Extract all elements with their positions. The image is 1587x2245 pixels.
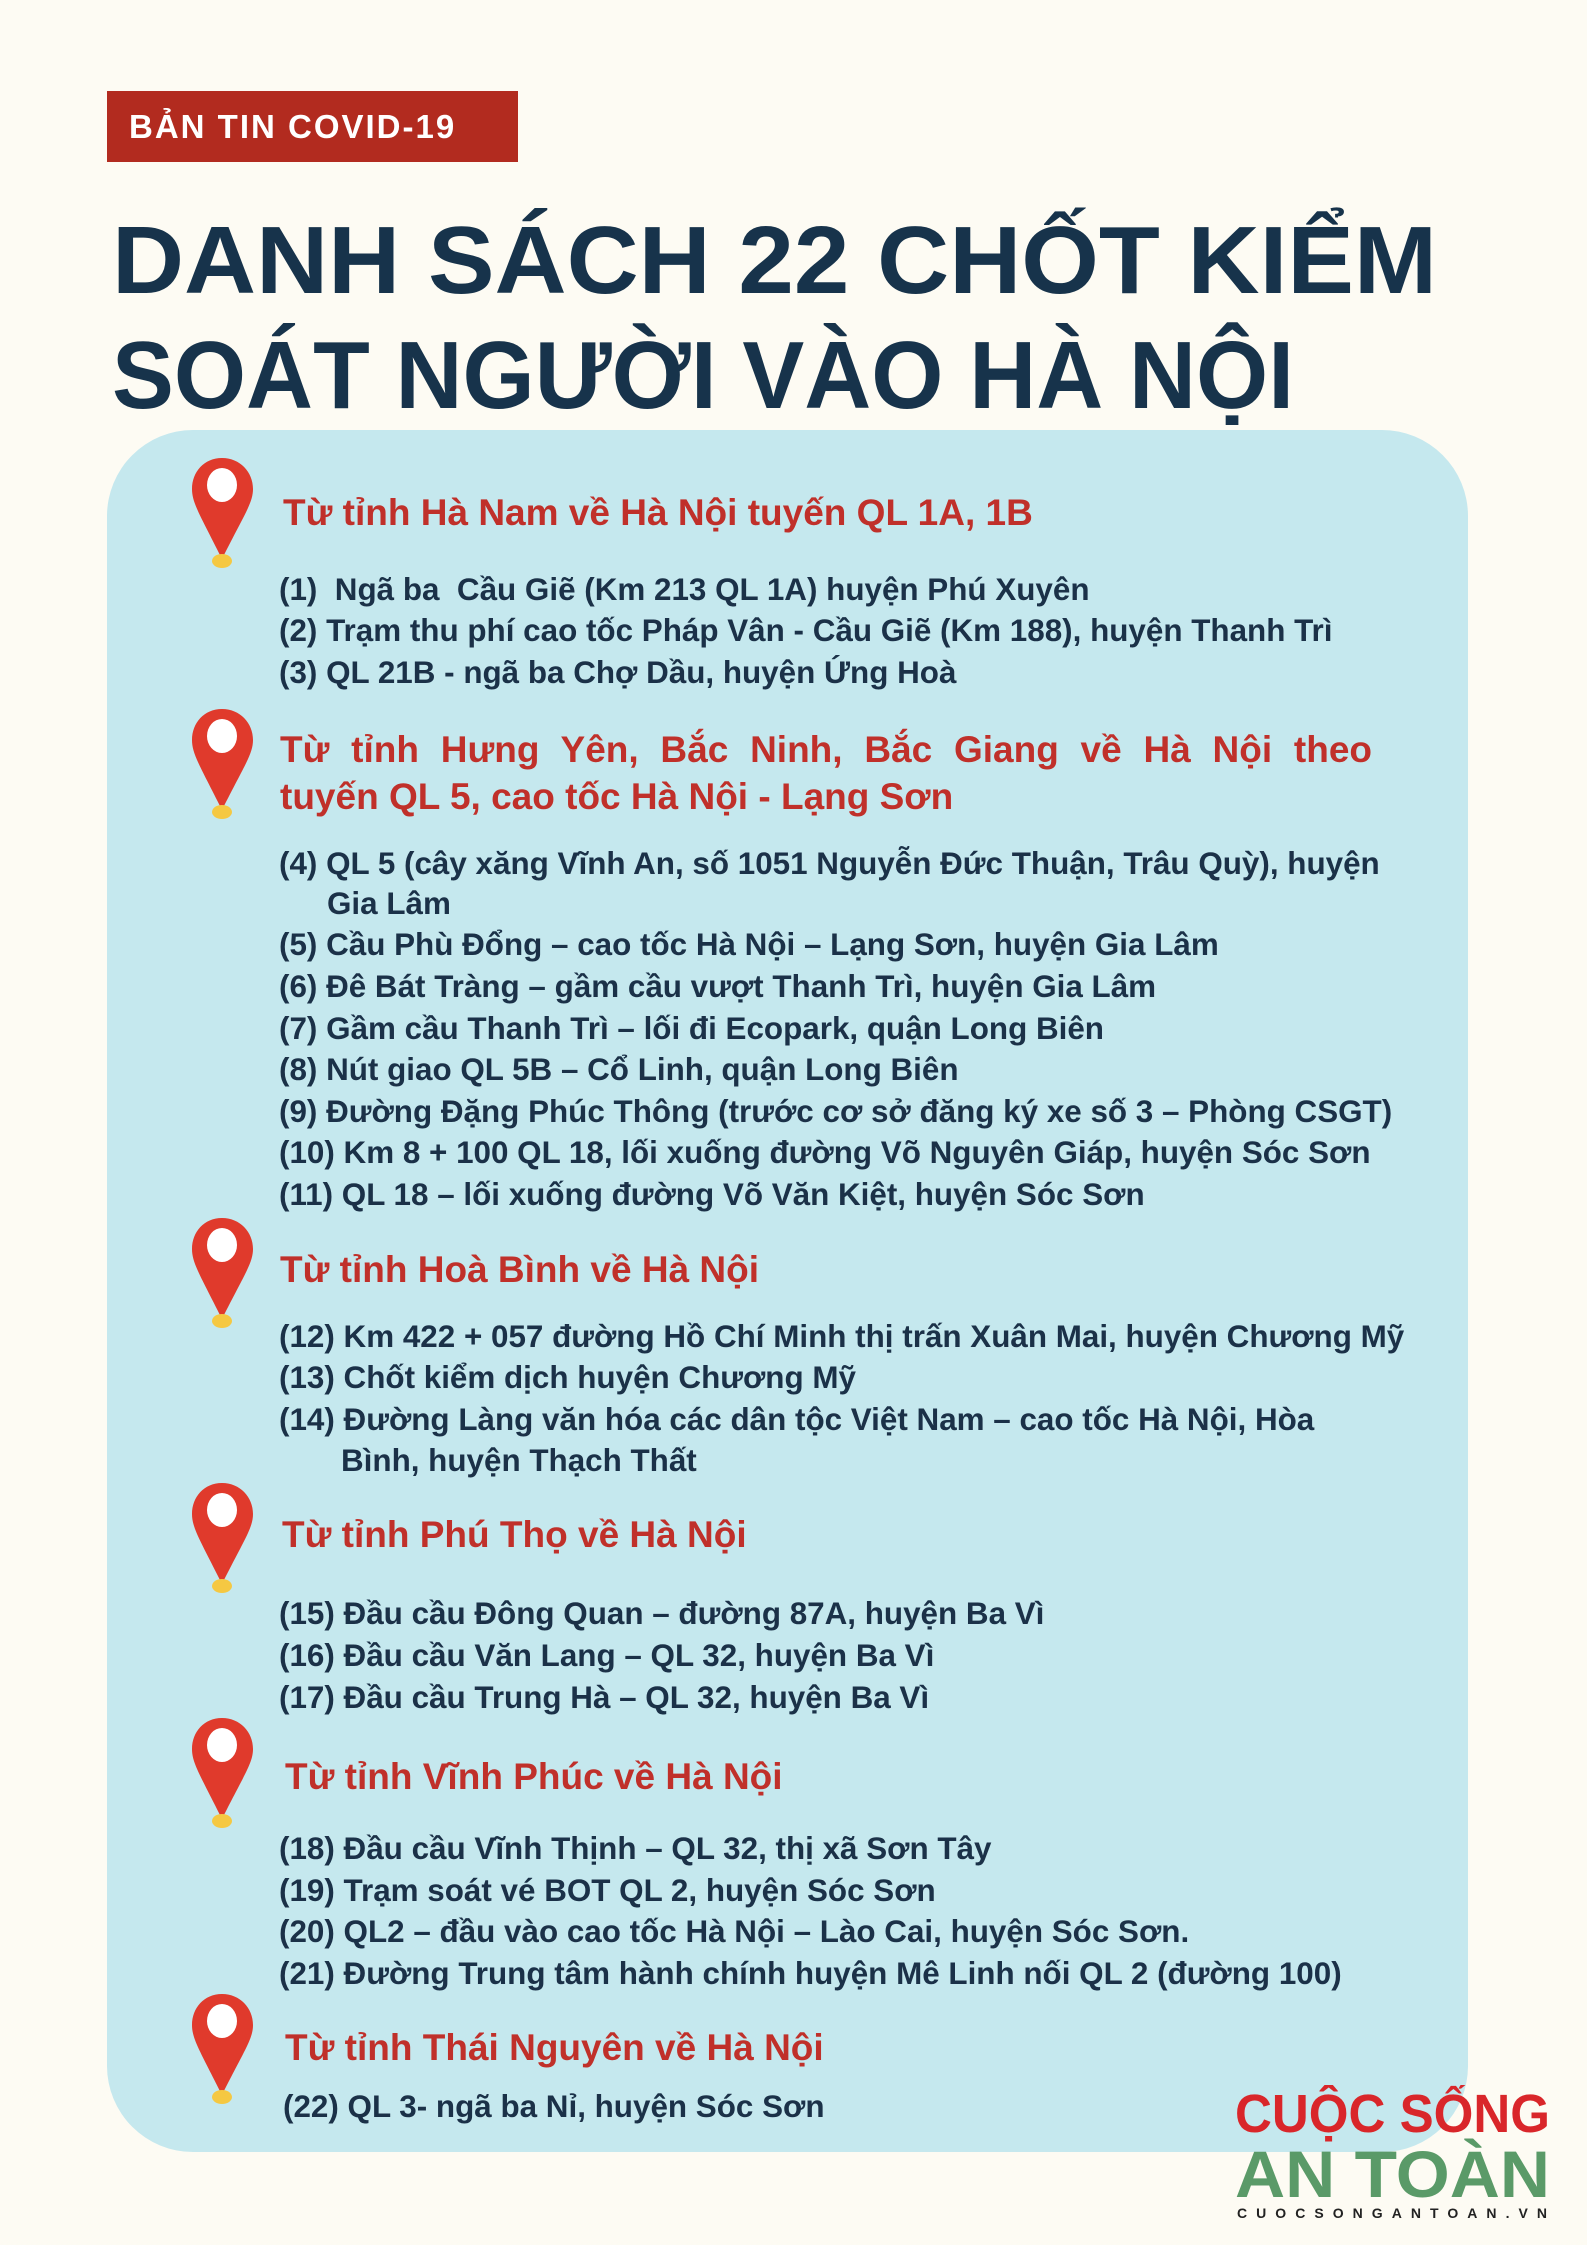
items 12-14 <box>279 1319 1404 1478</box>
text: (10) Km 8 + 100 QL 18, lối xuống đường Võ Nguyên Giáp, huyện Sóc Sơn <box>279 1135 1371 1170</box>
logo <box>1235 2085 1550 2221</box>
heading 2 <box>280 728 1372 817</box>
text: (18) Đầu cầu Vĩnh Thịnh – QL 32, thị xã Sơn Tây <box>279 1831 991 1866</box>
panel <box>107 430 1468 2152</box>
text: (3) QL 21B - ngã ba Chợ Dầu, huyện Ứng Hoà <box>279 655 956 690</box>
text: (4) QL 5 (cây xăng Vĩnh An, số 1051 Nguyễn Đức Thuận, Trâu Quỳ), huyện <box>279 846 1380 881</box>
text: (6) Đê Bát Tràng – gầm cầu vượt Thanh Trì, huyện Gia Lâm <box>279 969 1156 1004</box>
text: Từ tỉnh Hưng Yên, Bắc Ninh, Bắc Giang về Hà Nội theo <box>280 729 1372 770</box>
text: (1) Ngã ba Cầu Giẽ (Km 213 QL 1A) huyện Phú Xuyên <box>279 572 1090 607</box>
logo: AN TOÀN <box>1235 2137 1550 2211</box>
text: (19) Trạm soát vé BOT QL 2, huyện Sóc Sơn <box>279 1873 936 1908</box>
text: (21) Đường Trung tâm hành chính huyện Mê Linh nối QL 2 (đường 100) <box>279 1956 1342 1991</box>
text: (13) Chốt kiểm dịch huyện Chương Mỹ <box>279 1360 856 1395</box>
text: (2) Trạm thu phí cao tốc Pháp Vân - Cầu Giẽ (Km 188), huyện Thanh Trì <box>279 613 1332 648</box>
badge: BẢN TIN COVID-19 <box>129 108 456 145</box>
text: (5) Cầu Phù Đổng – cao tốc Hà Nội – Lạng Sơn, huyện Gia Lâm <box>279 927 1219 962</box>
logo: CUỘC SỐNG <box>1235 2085 1550 2144</box>
text: (16) Đầu cầu Văn Lang – QL 32, huyện Ba Vì <box>279 1638 934 1673</box>
text: (17) Đầu cầu Trung Hà – QL 32, huyện Ba Vì <box>279 1680 929 1715</box>
heading 5: Từ tỉnh Vĩnh Phúc về Hà Nội <box>285 1756 783 1797</box>
text: (9) Đường Đặng Phúc Thông (trước cơ sở đăng ký xe số 3 – Phòng CSGT) <box>279 1094 1392 1129</box>
title: SOÁT NGƯỜI VÀO HÀ NỘI <box>112 321 1294 429</box>
badge <box>107 91 518 162</box>
text: (7) Gầm cầu Thanh Trì – lối đi Ecopark, quận Long Biên <box>279 1011 1104 1046</box>
heading 1: Từ tỉnh Hà Nam về Hà Nội tuyến QL 1A, 1B <box>283 492 1033 533</box>
title <box>112 206 1437 429</box>
heading 3: Từ tỉnh Hoà Bình về Hà Nội <box>280 1249 759 1290</box>
heading 6: Từ tỉnh Thái Nguyên về Hà Nội <box>285 2027 824 2068</box>
text: (12) Km 422 + 057 đường Hồ Chí Minh thị trấn Xuân Mai, huyện Chương Mỹ <box>279 1319 1404 1354</box>
logo: CUOCSONGANTOAN.VN <box>1237 2205 1547 2221</box>
text: (8) Nút giao QL 5B – Cổ Linh, quận Long Biên <box>279 1052 959 1087</box>
text: (11) QL 18 – lối xuống đường Võ Văn Kiệt, huyện Sóc Sơn <box>279 1177 1145 1212</box>
text: (20) QL2 – đầu vào cao tốc Hà Nội – Lào Cai, huyện Sóc Sơn. <box>279 1914 1189 1949</box>
heading 4: Từ tỉnh Phú Thọ về Hà Nội <box>282 1514 747 1555</box>
text: tuyến QL 5, cao tốc Hà Nội - Lạng Sơn <box>280 776 953 817</box>
text: (14) Đường Làng văn hóa các dân tộc Việt Nam – cao tốc Hà Nội, Hòa <box>279 1402 1314 1437</box>
text: Bình, huyện Thạch Thất <box>341 1443 697 1478</box>
text: (15) Đầu cầu Đông Quan – đường 87A, huyện Ba Vì <box>279 1596 1044 1631</box>
items 4-11 <box>279 846 1392 1212</box>
pins <box>192 458 253 2104</box>
items 18-21 <box>279 1831 1342 1991</box>
text: Gia Lâm <box>327 886 451 921</box>
items 1-3 <box>279 572 1332 690</box>
item 22: (22) QL 3- ngã ba Nỉ, huyện Sóc Sơn <box>283 2089 825 2124</box>
title: DANH SÁCH 22 CHỐT KIỂM <box>112 206 1437 314</box>
items 15-17 <box>279 1596 1044 1715</box>
